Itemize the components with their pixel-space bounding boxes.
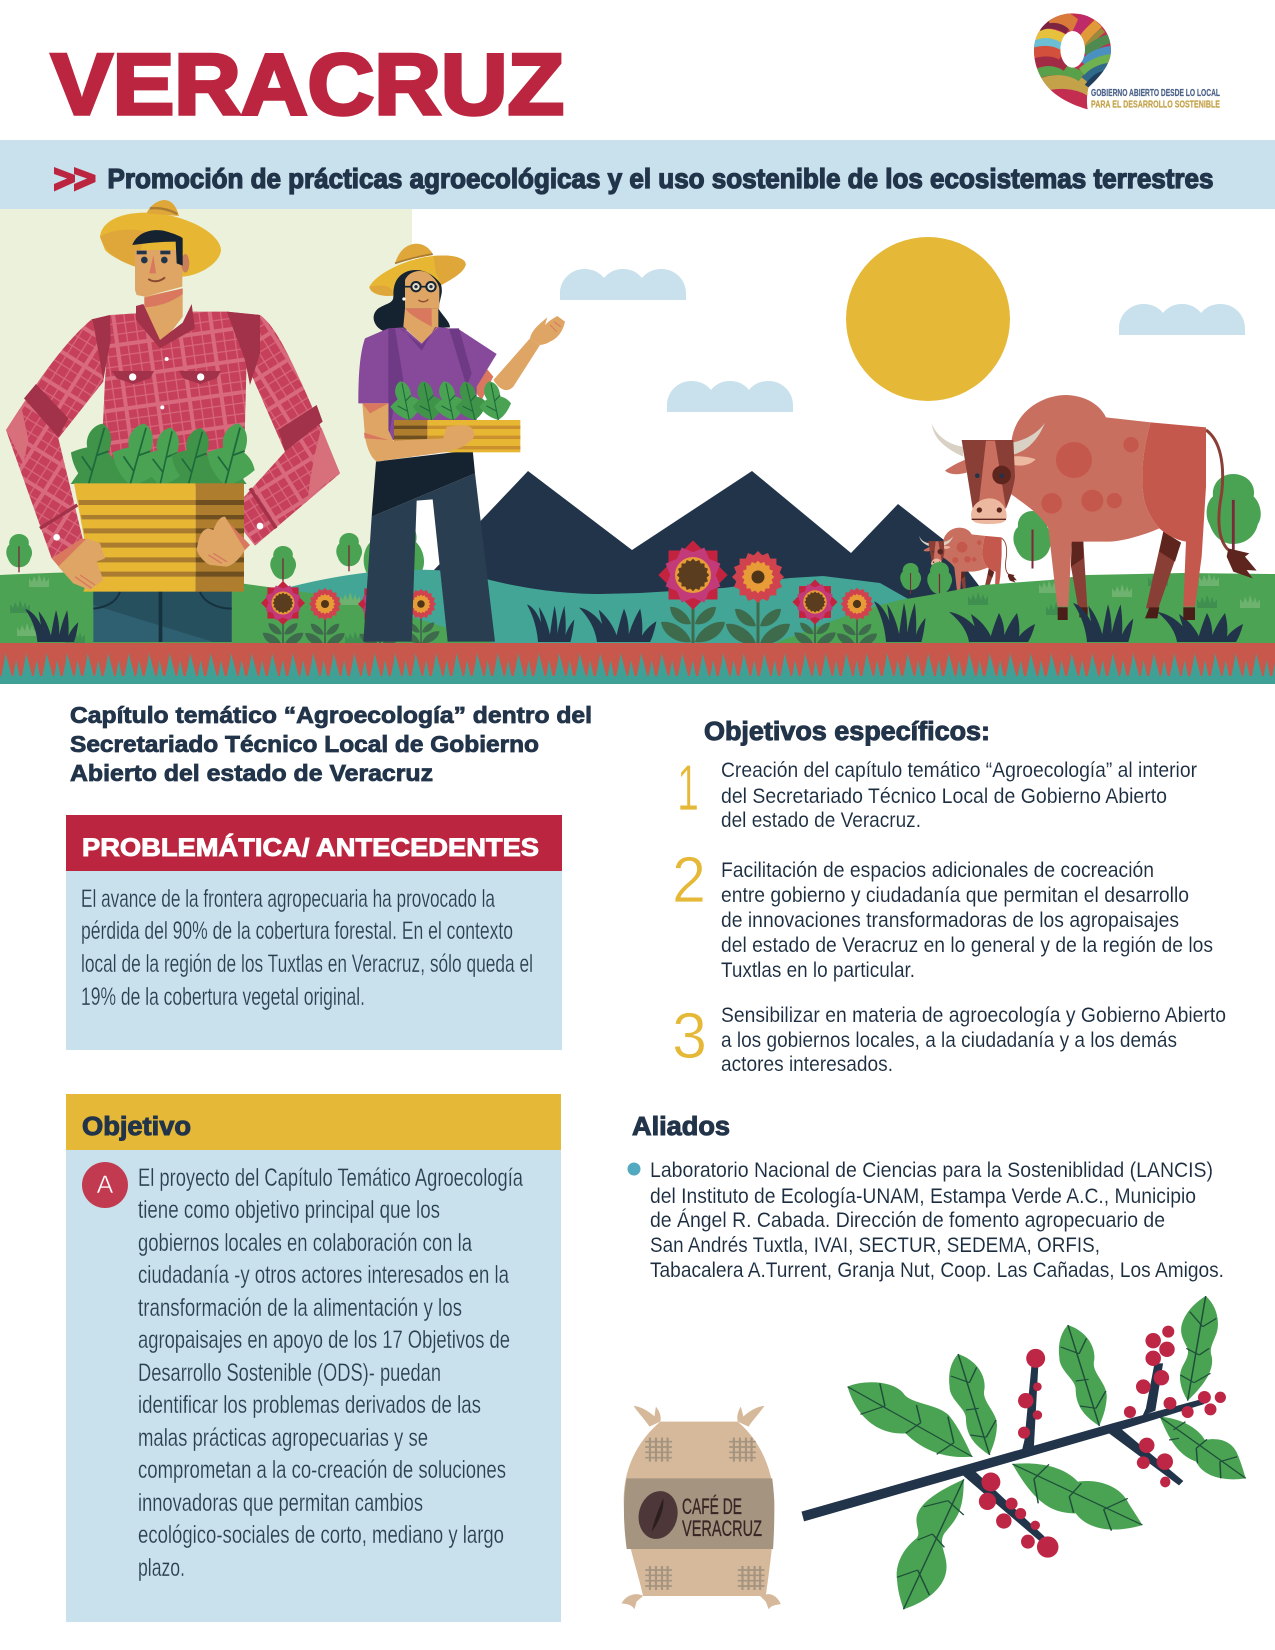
panel text: 19% de la cobertura vegetal original. — [81, 983, 365, 1011]
grass tufts — [10, 573, 1260, 644]
panel text: malas prácticas agropecuarias y se — [138, 1424, 428, 1452]
intro heading — [70, 702, 592, 786]
ground strip — [0, 643, 1275, 684]
small cow — [919, 528, 1017, 595]
intro heading: Secretariado Técnico Local de Gobierno — [70, 731, 539, 757]
aliados list — [628, 1158, 1224, 1282]
neck and collar — [136, 288, 195, 348]
objective 1: del Secretariado Técnico Local de Gobierno Abierto — [721, 784, 1167, 808]
forearm and hand — [362, 403, 474, 462]
objective 2: 2 — [672, 843, 706, 916]
cream backdrop — [0, 209, 412, 609]
stems — [801, 1363, 1204, 1541]
objective 3: actores interesados. — [721, 1052, 893, 1076]
panel header — [66, 815, 562, 871]
objective 1: 1 — [677, 751, 699, 824]
panel text: transformación de la alimentación y los — [138, 1294, 462, 1322]
panel text: agropaisajes en apoyo de los 17 Objetivos de — [138, 1326, 510, 1354]
neck and face — [398, 271, 439, 351]
green hills — [0, 572, 1275, 643]
berries — [979, 1326, 1226, 1558]
panel text: ciudadanía -y otros actores interesados en la — [138, 1261, 509, 1289]
hat — [369, 244, 466, 296]
mountains — [434, 471, 990, 600]
objective 2: Facilitación de espacios adicionales de cocreación — [721, 858, 1154, 882]
far trees — [6, 517, 424, 607]
shirt — [358, 327, 497, 440]
sun — [846, 237, 1010, 401]
coffee sack — [622, 1406, 781, 1609]
objective 1 — [677, 751, 1197, 832]
crate — [74, 483, 244, 592]
teal hill — [232, 570, 910, 643]
panel text: tiene como objetivo principal que los — [138, 1196, 440, 1224]
aliados list: de Ángel R. Cabada. Dirección de fomento agropecuario de — [650, 1207, 1165, 1232]
agave over bull legs — [1073, 603, 1133, 642]
panel text — [81, 885, 533, 1011]
panel text: comprometan a la co-creación de soluciones — [138, 1456, 506, 1484]
objective 2 — [672, 843, 1213, 982]
hands — [52, 517, 250, 590]
agave plants — [25, 602, 1243, 642]
logo: gobierno abierto — [1030, 10, 1220, 113]
jeans — [93, 590, 232, 642]
panel text: pérdida del 90% de la cobertura forestal. En el contexto — [81, 917, 513, 945]
subtitle band: Promoción de prácticas agroecológicas y el uso sostenible de los ecosistemas terrestres — [108, 163, 1214, 194]
title: VERACRUZ — [51, 37, 564, 133]
panel: objetivo — [66, 1094, 561, 1622]
aliados list: Laboratorio Nacional de Ciencias para la Sosteniblidad (LANCIS) — [650, 1158, 1213, 1182]
panel header: PROBLEMÁTICA/ ANTECEDENTES — [82, 833, 539, 862]
badge A: A — [97, 1171, 114, 1199]
panel text: plazo. — [138, 1554, 185, 1582]
heading: objetivos específicos: Objetivos específicos: — [704, 718, 990, 746]
panel text: El proyecto del Capítulo Temático Agroecología — [138, 1164, 523, 1192]
panel text — [138, 1164, 523, 1582]
objective 2: de innovaciones transformadoras de los agropaisajes — [721, 908, 1179, 932]
hero illustration — [0, 200, 1275, 684]
bull — [932, 395, 1257, 620]
coffee sack: CAFÉ DE — [682, 1494, 742, 1519]
subtitle band — [0, 140, 1275, 209]
objective 3: a los gobiernos locales, a la ciudadanía y a los demás — [721, 1028, 1177, 1052]
hair — [374, 264, 450, 331]
seedlings — [386, 378, 514, 424]
objective 3: Sensibilizar en materia de agroecología y Gobierno Abierto — [721, 1003, 1226, 1027]
aliados list: San Andrés Tuxtla, IVAI, SECTUR, SEDEMA, ORFIS, — [650, 1233, 1100, 1257]
legs — [363, 450, 495, 642]
seedlings — [64, 418, 265, 492]
shirt — [6, 312, 340, 558]
leaves — [848, 1296, 1246, 1609]
panel text: gobiernos locales en colaboración con la — [138, 1229, 472, 1257]
objective 1: Creación del capítulo temático “Agroecología” al interior — [721, 758, 1197, 782]
objective 2: Tuxtlas en lo particular. — [721, 958, 915, 982]
panel text: local de la región de los Tuxtlas en Veracruz, sólo queda el — [81, 950, 533, 978]
face — [132, 230, 189, 297]
badge A — [82, 1162, 128, 1208]
objective 2: entre gobierno y ciudadanía que permitan el desarrollo — [721, 883, 1189, 907]
sunflowers — [261, 540, 877, 647]
panel: problemática — [66, 815, 562, 1050]
coffee sack: VERACRUZ — [682, 1516, 762, 1541]
trees on the hill — [900, 474, 1261, 599]
panel text: identificar los problemas derivados de las — [138, 1391, 481, 1419]
objective 3: 3 — [672, 999, 707, 1072]
panel text: El avance de la frontera agropecuaria ha provocado la — [81, 885, 495, 913]
hat back — [100, 213, 221, 277]
panel text: ecológico-sociales de corto, mediano y largo — [138, 1521, 504, 1549]
man farmer — [6, 200, 340, 642]
coffee branch — [801, 1296, 1246, 1609]
panel text: Desarrollo Sostenible (ODS)- puedan — [138, 1359, 441, 1387]
panel header: Objetivo — [82, 1113, 191, 1141]
objective 2: del estado de Veracruz en lo general y de la región de los — [721, 933, 1213, 957]
objective 1: del estado de Veracruz. — [721, 808, 921, 832]
intro heading: Abierto del estado de Veracruz — [70, 760, 433, 786]
aliados list: del Instituto de Ecología-UNAM, Estampa Verde A.C., Municipio — [650, 1184, 1196, 1208]
objective 3 — [672, 999, 1226, 1076]
intro heading: Capítulo temático “Agroecología” dentro del — [70, 702, 592, 728]
crate — [394, 420, 520, 452]
clouds — [560, 269, 1245, 412]
woman farmer — [358, 244, 565, 642]
raised arm — [468, 316, 565, 400]
panel text: innovadoras que permitan cambios — [138, 1489, 423, 1517]
heading: aliados: Aliados — [632, 1113, 730, 1141]
panel header — [66, 1094, 561, 1150]
